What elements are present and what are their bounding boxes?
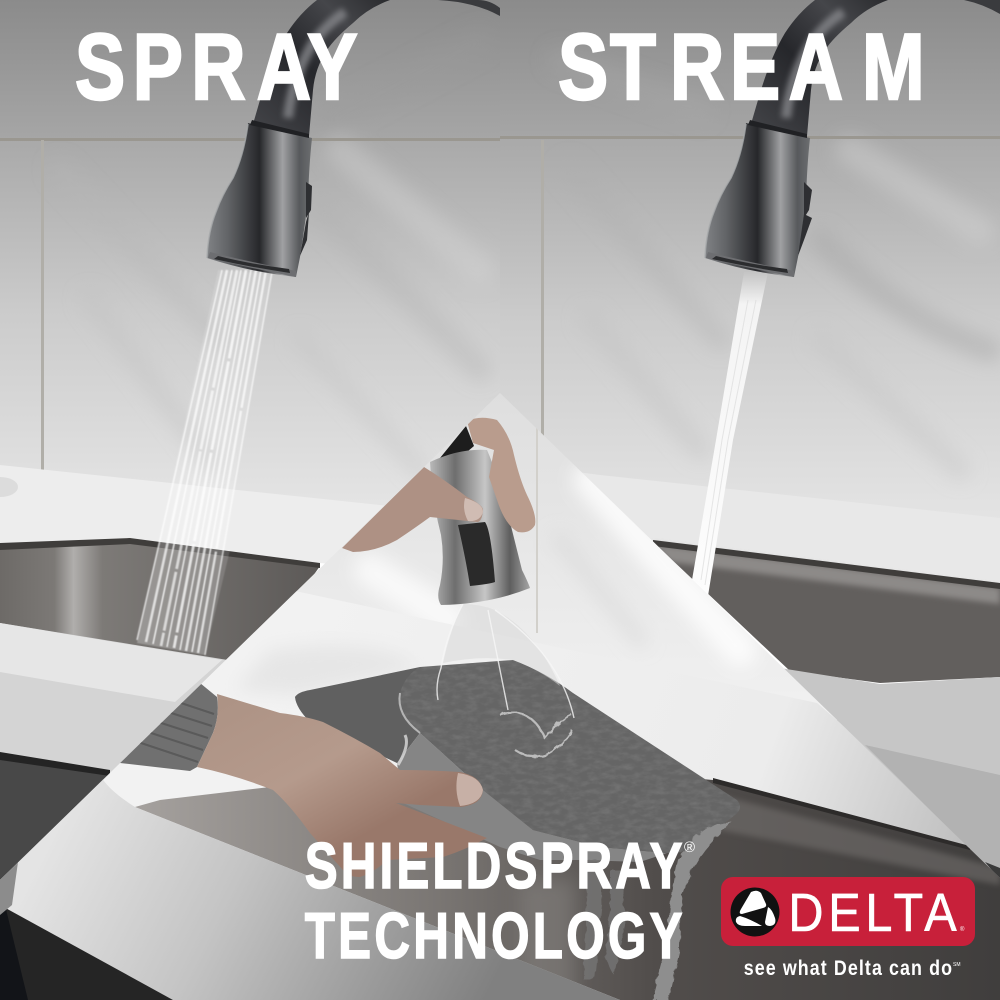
water bell: [437, 604, 574, 718]
right faucet: [705, 0, 1000, 277]
wordmark: DELTA: [788, 882, 957, 943]
left front counter: [0, 623, 226, 773]
upper wall tile: [500, 0, 1000, 138]
faucet head: [207, 123, 312, 277]
front counter: [0, 775, 620, 1000]
logo: Delta: [721, 877, 975, 980]
lower wall tile: [500, 138, 1000, 538]
icon: Delta trinity mark: [730, 888, 780, 936]
sleeve: [120, 683, 218, 771]
center sink basin: [135, 770, 1000, 1000]
left counter top: [0, 465, 384, 564]
right front counter: [784, 668, 1000, 818]
bottom cabinet: [0, 905, 173, 1000]
heading: spray: SPRAY: [75, 15, 357, 120]
plate water: [399, 660, 740, 853]
right counter top: [583, 473, 1000, 583]
water spill from plate: [584, 822, 732, 1000]
sprayer hose: [440, 426, 474, 458]
spray water: [137, 270, 272, 655]
lower wall tile: [0, 140, 500, 520]
heading: stream: STREAM: [558, 15, 925, 120]
right sink basin: [653, 542, 1000, 683]
stainless highlight in sink: [520, 878, 578, 982]
plate underside: [397, 733, 667, 862]
logo: Delta: SM: [953, 962, 960, 968]
lower hand: [197, 694, 487, 877]
faucet head: [705, 123, 810, 277]
panel: ShieldSpray demonstration: [0, 390, 1000, 1000]
panel: stream scene: [500, 0, 1000, 880]
faucet spout: [253, 0, 500, 136]
faucet spout: [751, 0, 1000, 136]
upper wall tile: [0, 0, 500, 140]
center counter: [0, 591, 1000, 880]
water splash: [500, 713, 572, 757]
plate back: [295, 667, 420, 763]
sprayer button: [458, 522, 495, 586]
tagline: see what Delta can do: [744, 957, 952, 980]
logo plate: [721, 877, 975, 946]
hand-held sprayer: [430, 450, 530, 605]
center wall: [226, 394, 837, 720]
heading: shieldspray technology: SHIELDSPRAY: [305, 831, 682, 903]
left sink basin: [0, 544, 319, 660]
upper hand: [342, 418, 535, 552]
stream water: [692, 272, 768, 596]
heading: shieldspray technology: [305, 831, 695, 973]
heading: shieldspray technology: ®: [684, 839, 695, 856]
left faucet: [207, 0, 500, 277]
arm sleeve corner: [0, 862, 18, 915]
logo: Delta: ®: [960, 926, 965, 933]
lower cabinet: [0, 760, 108, 880]
water drip: [398, 735, 406, 765]
panel: spray scene: [0, 0, 500, 890]
sprayer body: [430, 450, 530, 605]
plate: [295, 660, 740, 862]
heading: shieldspray technology: TECHNOLOGY: [305, 901, 682, 973]
